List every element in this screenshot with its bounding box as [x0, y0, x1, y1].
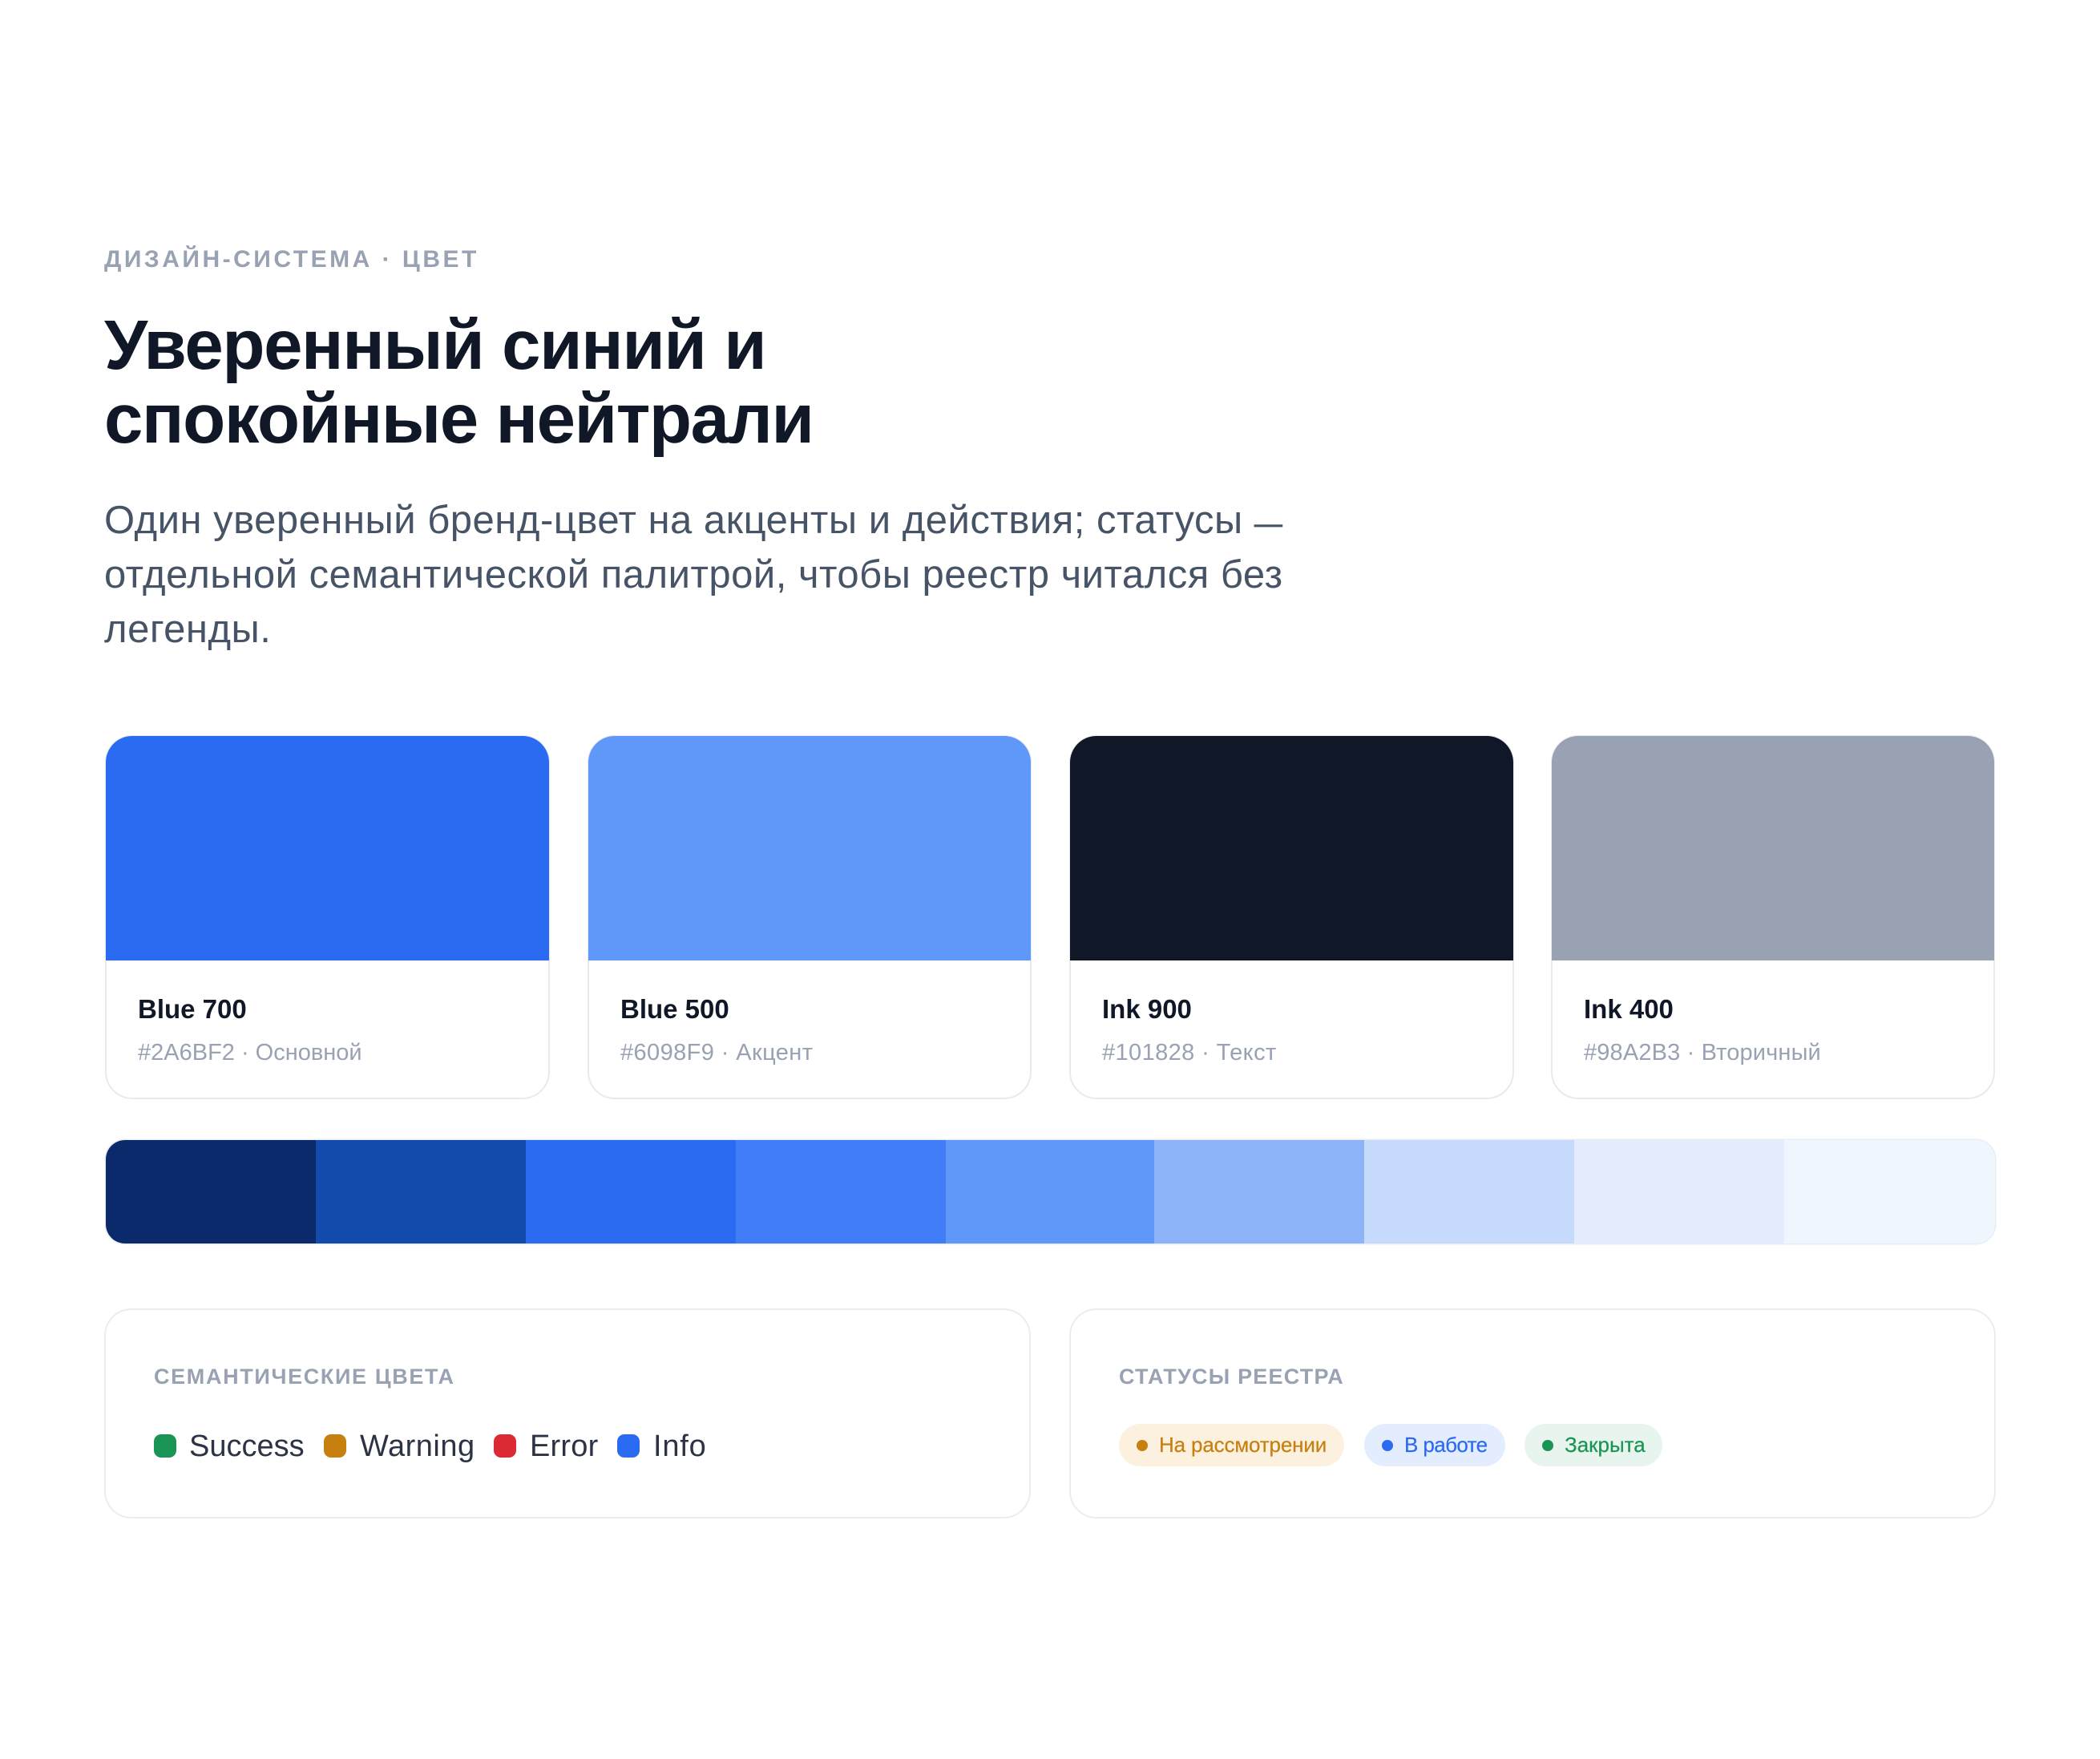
- intro paragraph: [104, 499, 1283, 651]
- legend item: Success: Success: [189, 1429, 305, 1463]
- intro paragraph: Один уверенный бренд-цвет на акценты и действия; статусы —: [104, 499, 1282, 542]
- blue tonal ramp: [106, 1140, 1995, 1243]
- swatch: Blue 700: [106, 736, 549, 960]
- code: Blue 500: #6098F9 · Акцент: [620, 1040, 813, 1066]
- card: Ink 900: [1069, 735, 1514, 1099]
- swatch: Ink 900: [1070, 736, 1513, 960]
- card: Blue 500: [588, 735, 1032, 1099]
- swatch: Blue 500: [588, 736, 1031, 960]
- intro paragraph: легенды.: [104, 608, 271, 651]
- card: Ink 400: [1551, 735, 1995, 1099]
- title: спокойные нейтрали: [104, 380, 814, 458]
- status pill: Закрыта: [1525, 1424, 1662, 1466]
- title: [104, 306, 814, 458]
- status pill: Закрыта: Закрыта: [1565, 1433, 1646, 1457]
- title: Уверенный синий и: [104, 306, 765, 384]
- legend: semantic colours: [154, 1429, 707, 1463]
- intro paragraph: отдельной семантической палитрой, чтобы реестр читался без: [104, 553, 1283, 596]
- legend item: Info: Info: [653, 1429, 707, 1463]
- panel: registry statuses: [1069, 1308, 1996, 1518]
- heading: semantic colours: СЕМАНТИЧЕСКИЕ ЦВЕТА: [154, 1365, 455, 1389]
- swatch: Ink 400: [1552, 736, 1994, 960]
- legend item: Error: Error: [530, 1429, 598, 1463]
- code: Blue 700: #2A6BF2 · Основной: [138, 1040, 362, 1066]
- status pill: В работе: [1364, 1424, 1505, 1466]
- name: Ink 900: Ink 900: [1102, 994, 1192, 1024]
- name: Blue 500: Blue 500: [620, 994, 729, 1024]
- name: Blue 700: Blue 700: [138, 994, 247, 1024]
- status pill: В работе: В работе: [1404, 1433, 1488, 1457]
- card: Blue 700: [105, 735, 550, 1099]
- code: Ink 400: #98A2B3 · Вторичный: [1584, 1040, 1821, 1066]
- panel: semantic colours: [104, 1308, 1031, 1518]
- legend item: Error: [494, 1429, 598, 1463]
- legend item: Warning: Warning: [360, 1429, 475, 1463]
- name: Ink 400: Ink 400: [1584, 994, 1674, 1024]
- code: Ink 900: #101828 · Текст: [1102, 1040, 1277, 1066]
- heading: registry statuses: СТАТУСЫ РЕЕСТРА: [1119, 1365, 1344, 1389]
- status pill: На рассмотрении: На рассмотрении: [1159, 1433, 1327, 1457]
- eyebrow label: ДИЗАЙН-СИСТЕМА · ЦВЕТ: [104, 246, 479, 273]
- status pill: На рассмотрении: [1119, 1424, 1344, 1466]
- legend item: Info: [617, 1429, 707, 1463]
